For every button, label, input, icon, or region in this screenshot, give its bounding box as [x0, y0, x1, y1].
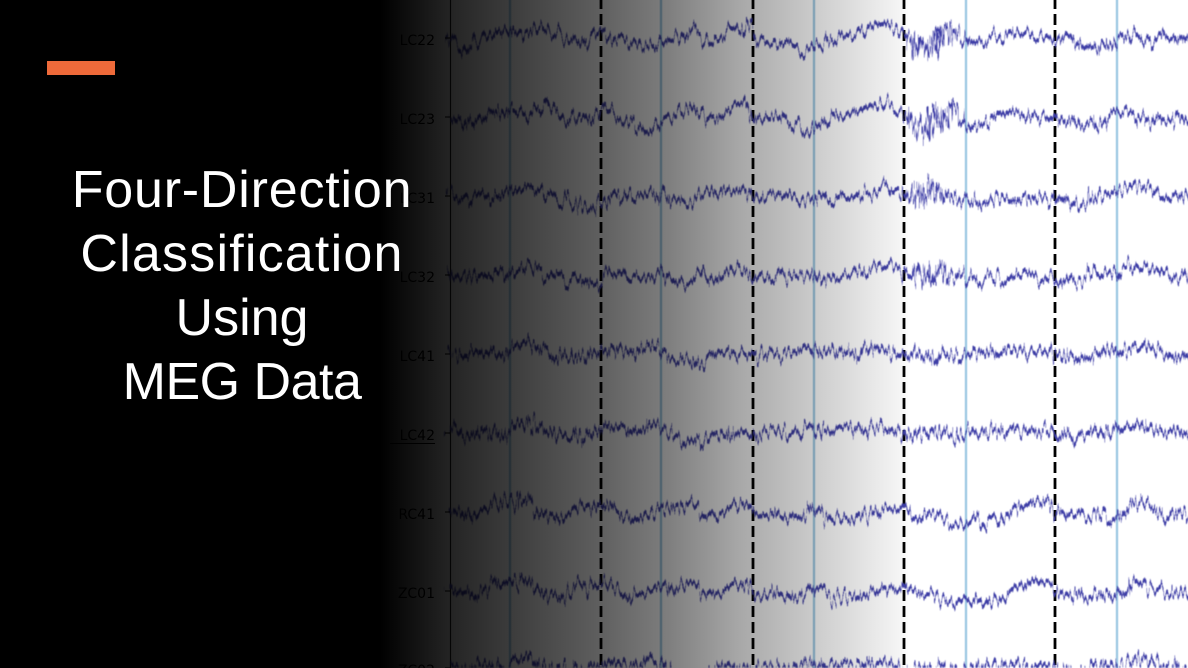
- channel labels: ZC01: [398, 586, 435, 602]
- waveform traces: [450, 22, 1188, 668]
- title: MEG Data: [123, 353, 361, 411]
- channel labels: LC42: [400, 428, 435, 444]
- channel labels: LC41: [400, 349, 435, 365]
- vertical event markers: [450, 0, 1117, 668]
- title: Classification: [80, 225, 404, 283]
- channel labels: LC23: [400, 112, 435, 128]
- channel labels: LC32: [400, 270, 435, 286]
- channel labels: LC22: [400, 33, 435, 49]
- channel tick marks: [390, 38, 450, 668]
- channel labels: [398, 33, 435, 668]
- channel labels: RC41: [398, 507, 435, 523]
- title: Using: [176, 289, 308, 347]
- accent bar: [47, 61, 115, 75]
- channel labels: LC31: [400, 191, 435, 207]
- title: Four-Direction: [72, 161, 412, 219]
- title: [72, 161, 412, 411]
